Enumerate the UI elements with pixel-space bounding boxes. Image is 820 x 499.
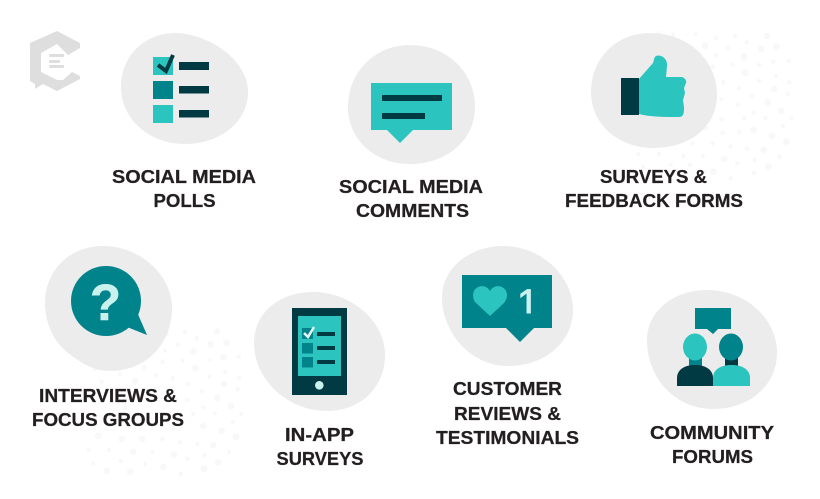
label: social media polls: POLLS (154, 191, 216, 211)
blob: in-app (254, 292, 385, 411)
icon: like notification (462, 275, 552, 342)
icon: speech bubble (371, 83, 452, 143)
label: social media polls: SOCIAL MEDIA (112, 167, 256, 187)
label: customer reviews and testimonials (436, 379, 579, 448)
label: interviews and focus groups (32, 386, 184, 430)
label: community forums: COMMUNITY (650, 423, 774, 443)
blob: forums (647, 290, 777, 409)
blob: reviews (442, 246, 573, 366)
icon: tablet (292, 308, 347, 395)
label: customer reviews and testimonials: CUSTOMER (453, 379, 562, 399)
label: surveys and feedback forms: SURVEYS & (600, 167, 707, 187)
label: social media comments: SOCIAL MEDIA (339, 177, 483, 197)
label: interviews and focus groups: INTERVIEWS & (39, 386, 177, 406)
blob: interviews (45, 246, 172, 371)
item: community forums (647, 290, 777, 467)
item: interviews and focus groups (32, 246, 184, 430)
item: surveys and feedback forms (565, 33, 743, 211)
label: social media comments: COMMENTS (356, 201, 469, 221)
item: customer reviews and testimonials (436, 246, 579, 448)
icon: question bubble (71, 266, 147, 336)
blob: surveys (591, 33, 717, 148)
label: customer reviews and testimonials: REVIEWS & (454, 404, 561, 424)
label: in-app surveys (276, 425, 364, 469)
item: social media comments (339, 45, 483, 221)
question mark: ? (90, 274, 121, 331)
icon: two people talking (677, 308, 750, 386)
label: surveys and feedback forms (565, 167, 743, 211)
blob: polls (121, 33, 248, 144)
decorative dots: upper right (638, 33, 792, 178)
label: in-app surveys: IN-APP (285, 425, 354, 445)
label: community forums (650, 423, 774, 467)
label: community forums: FORUMS (672, 447, 753, 467)
icon: checklist (153, 55, 209, 123)
label: social media comments (339, 177, 483, 221)
item: in-app surveys (254, 292, 385, 469)
label: customer reviews and testimonials: TESTIMONIALS (436, 428, 579, 448)
item: social media polls (112, 33, 256, 211)
like count: 1 (517, 282, 539, 326)
decorative dots: lower left (88, 332, 241, 474)
label: in-app surveys: SURVEYS (276, 449, 364, 469)
label: surveys and feedback forms: FEEDBACK FORMS (565, 191, 743, 211)
label: interviews and focus groups: FOCUS GROUPS (32, 410, 184, 430)
logo (30, 31, 80, 91)
icon: thumbs up (621, 56, 686, 117)
label: social media polls (112, 167, 256, 211)
blob: comments (348, 45, 475, 164)
